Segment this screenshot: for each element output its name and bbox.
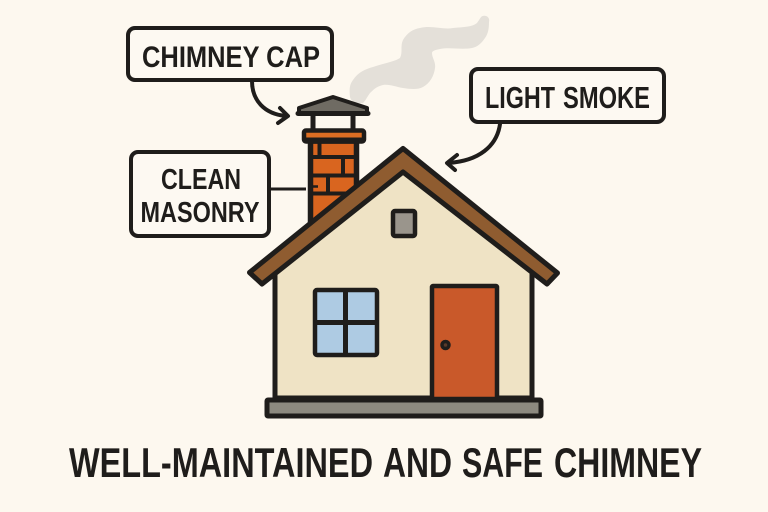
attic vent — [393, 211, 415, 236]
chimney brick stack — [310, 141, 357, 233]
title: WELL-MAINTAINED — [69, 439, 373, 486]
callout: clean masonry: MASONRY — [140, 197, 260, 229]
title: SAFE — [462, 439, 543, 486]
title — [69, 439, 702, 486]
roof — [250, 148, 558, 284]
callout: clean masonry — [131, 152, 306, 236]
window — [315, 290, 377, 355]
house walls — [275, 160, 532, 398]
chimney collar — [304, 130, 364, 142]
chimney cap — [299, 97, 367, 114]
house — [250, 148, 558, 416]
connector line — [269, 188, 306, 190]
chimney — [298, 97, 368, 233]
label box — [128, 28, 332, 80]
door knob — [442, 342, 449, 348]
arrow — [447, 124, 500, 170]
foundation slab — [267, 400, 541, 416]
smoke plume — [350, 16, 489, 103]
label text: CHIMNEY CAP — [142, 41, 320, 74]
door — [432, 286, 497, 399]
label text: LIGHT — [485, 80, 555, 115]
title: CHIMNEY — [554, 439, 702, 486]
callout: light smoke: SMOKE — [563, 80, 650, 115]
title: AND — [383, 439, 452, 486]
cap posts — [313, 114, 353, 130]
label text: CLEAN — [161, 164, 241, 196]
label box — [131, 152, 269, 236]
callout: chimney cap — [128, 28, 332, 123]
callout: light smoke — [447, 69, 664, 170]
arrow — [252, 81, 288, 123]
label box — [471, 69, 664, 122]
